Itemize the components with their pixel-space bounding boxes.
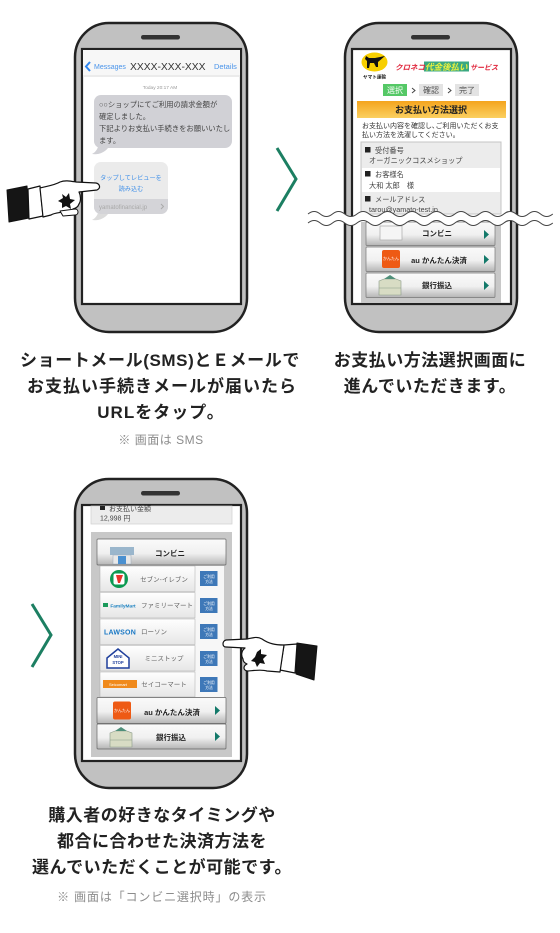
heading: step 3: 都合に合わせた決済方法を (57, 831, 267, 851)
timestamp: Today 20:17 AM (143, 85, 177, 91)
icon: pointing hand right (223, 637, 317, 680)
payment amount panel (91, 504, 232, 524)
store: Ministop: MINI (114, 654, 122, 659)
store: Seicomart: Seicomart (109, 682, 128, 687)
store list: 方法 (205, 579, 213, 584)
store: FamilyMart (103, 602, 193, 610)
message bubble: 確定しました。 (99, 112, 150, 121)
store: Lawson (104, 629, 167, 636)
message bubble (92, 95, 232, 154)
au payment button (97, 698, 226, 724)
heading: step 2: 進んでいただきます。 (344, 377, 516, 396)
order details table (361, 142, 501, 214)
payment amount panel: 12,998 円 (100, 514, 130, 522)
store list: 方法 (205, 659, 213, 664)
payment method buttons: かんたん (383, 255, 399, 261)
convenience store button (97, 539, 226, 565)
step tabs: 完了 (459, 86, 475, 95)
store: Ministop: STOP (112, 660, 124, 665)
bank transfer button: 銀行振込 (156, 732, 186, 742)
link preview bubble: タップしてレビューを (100, 174, 162, 182)
store: Lawson: ローソン (141, 629, 167, 636)
phone 1: SMS message screen (75, 23, 247, 332)
payment method buttons: au かんたん決済 (411, 255, 467, 265)
store list: ご利用 (203, 601, 215, 606)
payment method buttons: 銀行振込 (422, 280, 452, 290)
link preview bubble (92, 162, 168, 220)
Yamato logo: ヤマト運輸 (363, 74, 386, 80)
options panel (91, 532, 232, 757)
store list: 方法 (205, 606, 213, 611)
store list: ご利用 (203, 627, 215, 632)
note: step 3: ※ 画面は「コンビニ選択時」の表示 (57, 890, 267, 904)
arrow: step 2 to step 3 (32, 604, 51, 667)
note: step 1: ※ 画面は SMS (118, 433, 204, 447)
order details table: 大和 太郎 様 (369, 181, 414, 190)
step tabs: 選択 (387, 85, 403, 95)
service title: サービス (470, 64, 499, 72)
order details table: オーガニックコスメショップ (369, 156, 463, 165)
service title: クロネコ (395, 63, 425, 72)
order details table: 受付番号 (375, 146, 404, 155)
phone 2: payment selection screen (345, 23, 517, 332)
order details table: tarou@yamato-test.jp (369, 205, 438, 214)
au payment button: au かんたん決済 (144, 707, 200, 717)
service title (395, 62, 499, 72)
store list: ご利用 (203, 654, 215, 659)
heading: step 1: お支払い手続きメールが届いたら (27, 376, 297, 396)
store: Seicomart (103, 680, 187, 688)
store: Seicomart: セイコーマート (141, 680, 187, 688)
order details table: メールアドレス (375, 195, 425, 204)
heading: step 1: URLをタップ。 (97, 403, 225, 422)
usage guide buttons (200, 571, 218, 692)
order details table: お客様名 (375, 170, 404, 179)
section heading: お支払い方法選択 (395, 104, 467, 115)
link preview bubble: 読み込む (119, 185, 143, 193)
description text (362, 121, 498, 139)
message bubble: 下記よりお支払い手続きをお願いいたし (99, 124, 230, 133)
heading: step 3: 選んでいただくことが可能です。 (32, 857, 292, 877)
store list: ご利用 (203, 574, 215, 579)
SMS navigation bar: XXXX-XXX-XXX (130, 62, 206, 73)
link preview bubble: yamatofinancial.jp (99, 205, 148, 211)
store list: ご利用 (203, 680, 215, 685)
SMS navigation bar (83, 50, 240, 77)
heading: step 2 (334, 350, 526, 396)
store: Lawson: LAWSON (104, 630, 136, 636)
heading: step 1: ショートメール(SMS)とＥメールで (20, 351, 300, 370)
description text: お支払い内容を確認し､ご利用いただくお支 (362, 121, 498, 130)
Yamato logo (362, 52, 388, 80)
convenience store button: コンビニ (155, 548, 185, 558)
store: Ministop (107, 649, 184, 668)
heading: step 1 (20, 351, 300, 422)
store list: 方法 (205, 632, 213, 637)
store list: 方法 (205, 685, 213, 690)
phone 3: convenience store selection screen (75, 479, 247, 788)
heading: step 3 (32, 805, 292, 877)
au payment button: かんたん (114, 707, 130, 713)
step tabs (383, 84, 479, 96)
SMS navigation bar: Messages (94, 64, 126, 71)
service title: 代金後払い (425, 62, 468, 72)
heading: step 2: お支払い方法選択画面に (334, 350, 526, 370)
SMS navigation bar: Details (214, 62, 237, 71)
store: FamilyMart: ファミリーマート (141, 602, 193, 610)
store: Seven-Eleven: セブン-イレブン (140, 574, 188, 584)
store: FamilyMart: FamilyMart (110, 604, 136, 610)
icon: pointing hand left (7, 181, 100, 222)
description text: 払い方法を洗濯してください。 (362, 130, 460, 139)
bank transfer button (97, 724, 226, 749)
payment method buttons: コンビニ (422, 228, 452, 238)
heading: step 3: 購入者の好きなタイミングや (48, 805, 276, 825)
store: Ministop: ミニストップ (144, 654, 184, 662)
section heading (357, 101, 506, 118)
wavy page break (308, 212, 553, 226)
store list (100, 566, 224, 697)
step tabs: 確認 (423, 85, 439, 95)
payment method buttons (361, 222, 501, 303)
message bubble: ○○ショップにてご利用の請求金額が (99, 100, 218, 109)
message bubble: ます。 (99, 136, 120, 145)
payment amount panel: お支払い金額 (109, 504, 151, 513)
arrow: step 1 to step 2 (277, 148, 296, 211)
